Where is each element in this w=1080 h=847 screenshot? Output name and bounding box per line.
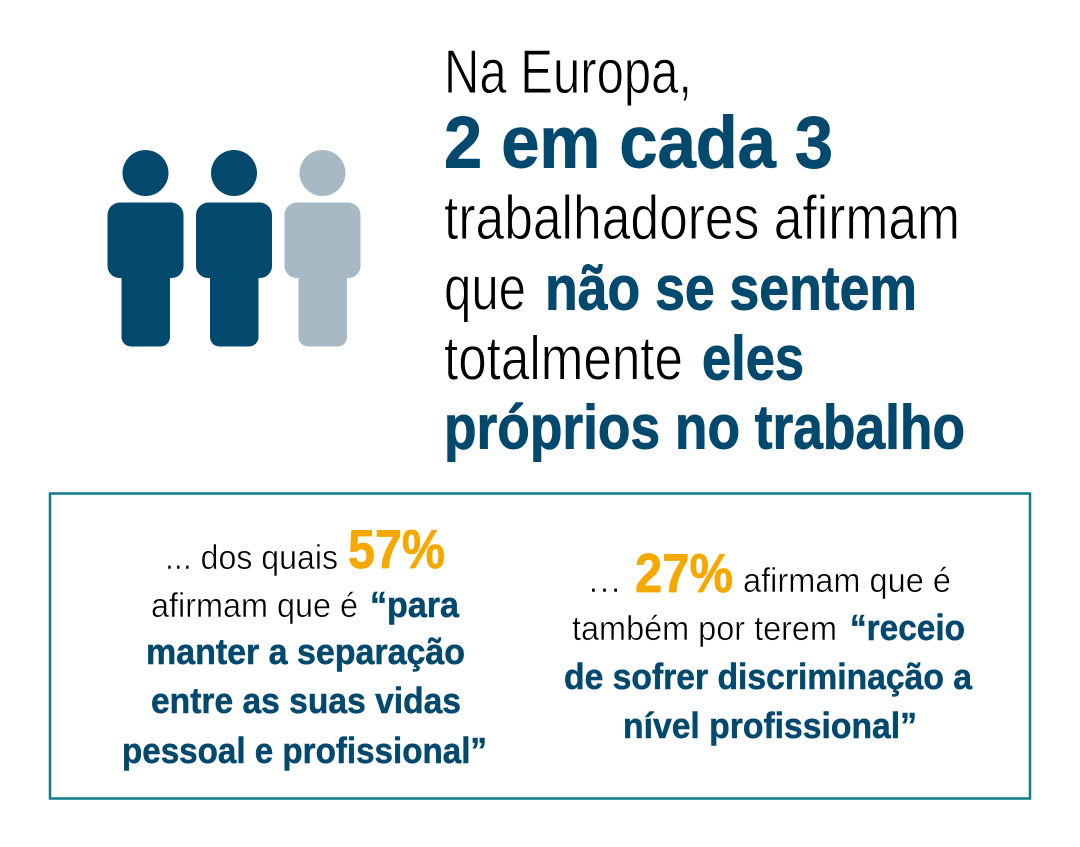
headline (444, 38, 965, 462)
headline: eles (702, 324, 804, 394)
text block: 27% statistic (564, 542, 973, 746)
icon: person 3 (muted) (284, 150, 360, 346)
headline: 2 em cada 3 (444, 102, 833, 184)
headline: totalmente (444, 324, 683, 394)
text block: 27% statistic: “receio (850, 607, 965, 648)
headline: Na Europa, (444, 38, 692, 107)
text block: 57% statistic: ... dos quais (165, 539, 338, 577)
text block: 57% statistic (122, 518, 487, 771)
text block: 57% statistic: afirmam que é (151, 587, 358, 625)
text block: 57% statistic: “para (370, 584, 460, 625)
text block: 27% statistic: nível profissional” (623, 705, 917, 746)
text block: 57% statistic: pessoal e profissional” (122, 730, 487, 771)
panel: statistics box (50, 494, 1030, 798)
text block: 57% statistic: 57% (348, 518, 445, 580)
headline: próprios no trabalho (444, 394, 965, 462)
text block: 27% statistic: de sofrer discriminação a (564, 656, 973, 697)
headline: não se sentem (545, 254, 917, 324)
text block: 27% statistic: também por terem (572, 610, 837, 648)
headline: que (444, 254, 526, 324)
text block: 27% statistic: … (587, 562, 622, 600)
icon: person 2 (196, 150, 272, 346)
headline: trabalhadores afirmam (444, 184, 960, 253)
icon: person 1 (107, 150, 184, 346)
text block: 57% statistic: manter a separação (146, 631, 465, 672)
text block: 57% statistic: entre as suas vidas (151, 680, 461, 721)
icon: three people, two highlighted (107, 150, 360, 346)
text block: 27% statistic: 27% (635, 542, 733, 604)
text block: 27% statistic: afirmam que é (743, 562, 951, 600)
